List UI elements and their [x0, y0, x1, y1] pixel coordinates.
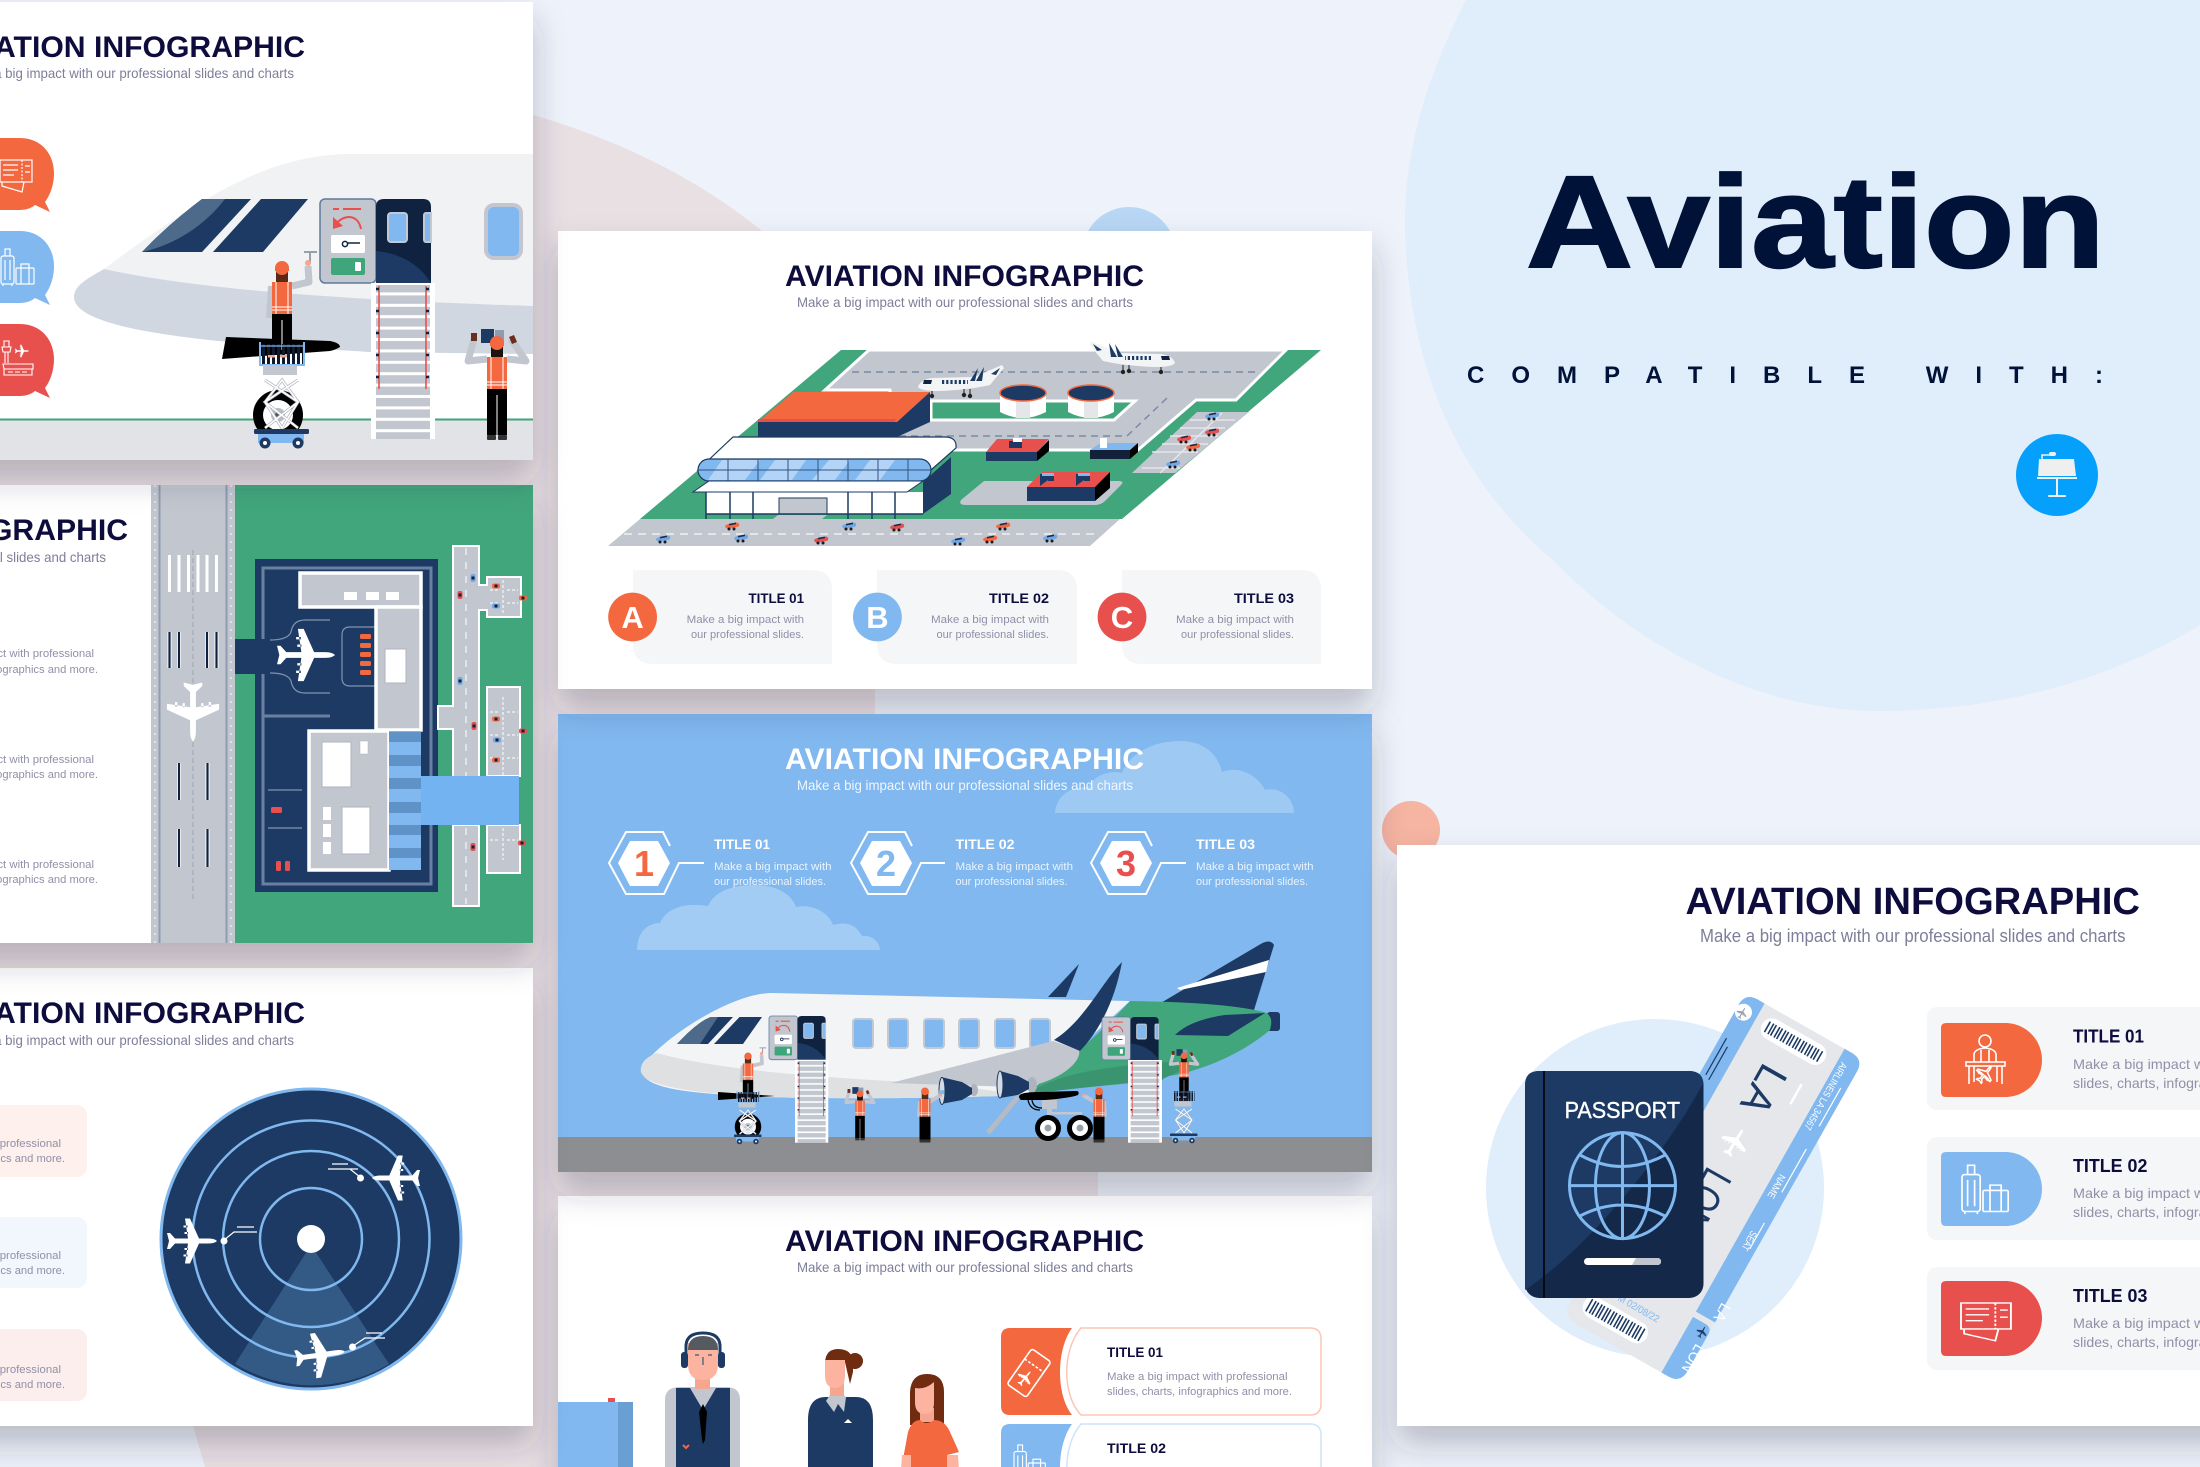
- check-in counter: [558, 1398, 633, 1467]
- cars: [656, 412, 1219, 546]
- small planes: [918, 341, 1175, 398]
- person: flight attendant: [808, 1349, 873, 1467]
- panel: aircraft service slide: [558, 714, 1372, 1172]
- card: B: B: [866, 600, 889, 635]
- card: passport title 01: TITLE 01: [2073, 1026, 2144, 1046]
- passport slide subtitle: Make a big impact with our professional slides and charts: [1700, 926, 2126, 946]
- card: B: our professional slides.: [936, 629, 1049, 641]
- passport: PASSPORT: [1565, 1097, 1680, 1123]
- text block 2: [0, 754, 98, 781]
- speech bubble: luggage: [0, 231, 54, 305]
- card: passport title 03: TITLE 03: [2073, 1286, 2147, 1306]
- step 1: TITLE 01: [714, 836, 770, 852]
- card: C: Make a big impact with: [1176, 614, 1294, 626]
- black wing section: [222, 337, 340, 359]
- ground crew: [734, 1048, 1198, 1144]
- cloud: lower: [637, 885, 880, 950]
- step 3: our professional slides.: [1196, 876, 1308, 888]
- step 2: 2: [876, 843, 896, 884]
- card: C: our professional slides.: [1181, 629, 1294, 641]
- panel: boarding slide: [0, 2, 533, 460]
- service slide title: AVIATION INFOGRAPHIC: [785, 743, 1144, 776]
- boarding pass: LA: [1731, 1057, 1796, 1123]
- step 1: 1: [634, 843, 654, 884]
- card: radar note 1: [0, 1105, 87, 1177]
- cloud: upper: [1055, 741, 1294, 813]
- passport: [1525, 1071, 1704, 1298]
- panel: staff slide: [558, 1196, 1372, 1467]
- boarding pass: LA: [1710, 1300, 1733, 1324]
- staff slide title: AVIATION INFOGRAPHIC: [785, 1225, 1144, 1258]
- background blob: top right: [1405, 0, 2200, 711]
- ground: [558, 1137, 1372, 1172]
- panel: airport slide: [558, 231, 1372, 689]
- step 1: Make a big impact with: [714, 861, 832, 873]
- card: C: C: [1111, 600, 1133, 635]
- passport slide title: AVIATION INFOGRAPHIC: [1686, 881, 2140, 923]
- panel: radar slide: [0, 968, 533, 1426]
- card: title 02: TITLE 02: [1107, 1440, 1166, 1456]
- background blob: pink: [0, 60, 1098, 1467]
- boarding pass: [1562, 992, 1864, 1383]
- person: pilot with headphones: [665, 1333, 740, 1467]
- service building 2: [1090, 438, 1138, 459]
- terminal site plan: [235, 485, 533, 943]
- boarding pass: AIRLINES LA 34567: [1801, 1060, 1848, 1132]
- service building 1: [986, 438, 1049, 461]
- card: title 01: TITLE 01: [1107, 1344, 1163, 1360]
- text block 1: [0, 648, 98, 676]
- subheading: compatible with: COMPATIBLE WITH:: [1467, 362, 2103, 389]
- card: A: A: [621, 600, 644, 635]
- card: passport title 01: [1927, 1007, 2200, 1110]
- step 1: [609, 832, 832, 894]
- step 3: Make a big impact with: [1196, 861, 1314, 873]
- card: title 01: [1001, 1328, 1321, 1415]
- card: passport title 02: TITLE 02: [2073, 1156, 2147, 1176]
- icon: keynote: [2016, 434, 2098, 516]
- card: B: TITLE 02: [989, 590, 1049, 606]
- heading: Aviation: Aviation: [1526, 148, 2105, 295]
- hangar: [758, 392, 930, 437]
- step 2: TITLE 02: [956, 836, 1015, 852]
- card: B: [853, 570, 1077, 664]
- step 2: Make a big impact with: [956, 861, 1073, 873]
- boarding pass: LON: [1668, 1161, 1740, 1241]
- backdrop circle: [1486, 1019, 1824, 1357]
- storage tanks: [1000, 385, 1114, 418]
- boarding stairs: [371, 283, 435, 439]
- staff slide subtitle: Make a big impact with our professional slides and charts: [797, 1259, 1133, 1275]
- card: passport title 02: [1927, 1137, 2200, 1240]
- decorative salmon circle: [1382, 801, 1440, 859]
- card: passport title 03: [1927, 1267, 2200, 1370]
- boarding pass: M 02/08/22: [1616, 1293, 1661, 1325]
- person: passenger: [901, 1374, 959, 1467]
- card: radar note 3: [0, 1329, 87, 1401]
- speech bubble: ticket: [0, 138, 54, 212]
- card: radar note 2: [0, 1217, 87, 1288]
- card: A: TITLE 01: [748, 590, 804, 606]
- terminal: [693, 437, 956, 519]
- card: B: Make a big impact with: [931, 614, 1049, 626]
- text block 3: [0, 859, 98, 886]
- runway: [151, 485, 235, 943]
- step 3: 3: [1116, 843, 1136, 884]
- service building 3: [960, 472, 1122, 505]
- boarding pass: SEAT: [1739, 1229, 1758, 1252]
- panel: runway slide: [0, 485, 533, 943]
- boarding stairs: [795, 1060, 1162, 1143]
- lift worker: [253, 252, 317, 448]
- aircraft door: [320, 199, 431, 283]
- marshaller: [468, 329, 526, 440]
- card: A: Make a big impact with: [687, 614, 804, 626]
- isometric airport: [608, 341, 1321, 546]
- step 1: our professional slides.: [714, 876, 826, 888]
- card: title 01: slides, charts, infographics and more.: [1107, 1386, 1292, 1398]
- fuselage close-up: [74, 154, 533, 354]
- card: A: [608, 570, 832, 664]
- apron: [0, 420, 533, 460]
- radar scope: [161, 1089, 461, 1389]
- step 3: [1091, 832, 1314, 894]
- decorative blue circle: [1082, 207, 1176, 301]
- card: C: TITLE 03: [1234, 590, 1294, 606]
- card: title 02: [1001, 1424, 1321, 1467]
- panel: passport slide: [1397, 845, 2200, 1426]
- card: title 01: Make a big impact with professional: [1107, 1371, 1288, 1383]
- step 2: our professional slides.: [956, 876, 1068, 888]
- boarding pass: LON: [1678, 1341, 1707, 1376]
- card: A: our professional slides.: [691, 629, 804, 641]
- airport slide title: AVIATION INFOGRAPHIC: [785, 260, 1144, 293]
- aircraft doors: [769, 1016, 1159, 1060]
- speech bubble: control tower: [0, 324, 54, 398]
- service slide subtitle: Make a big impact with our professional slides and charts: [797, 777, 1133, 793]
- airliner: [641, 942, 1280, 1141]
- step 2: [851, 832, 1073, 894]
- boarding pass: NAME: [1764, 1172, 1787, 1200]
- card: C: [1098, 570, 1321, 664]
- step 3: TITLE 03: [1196, 836, 1255, 852]
- airport slide subtitle: Make a big impact with our professional slides and charts: [797, 294, 1133, 310]
